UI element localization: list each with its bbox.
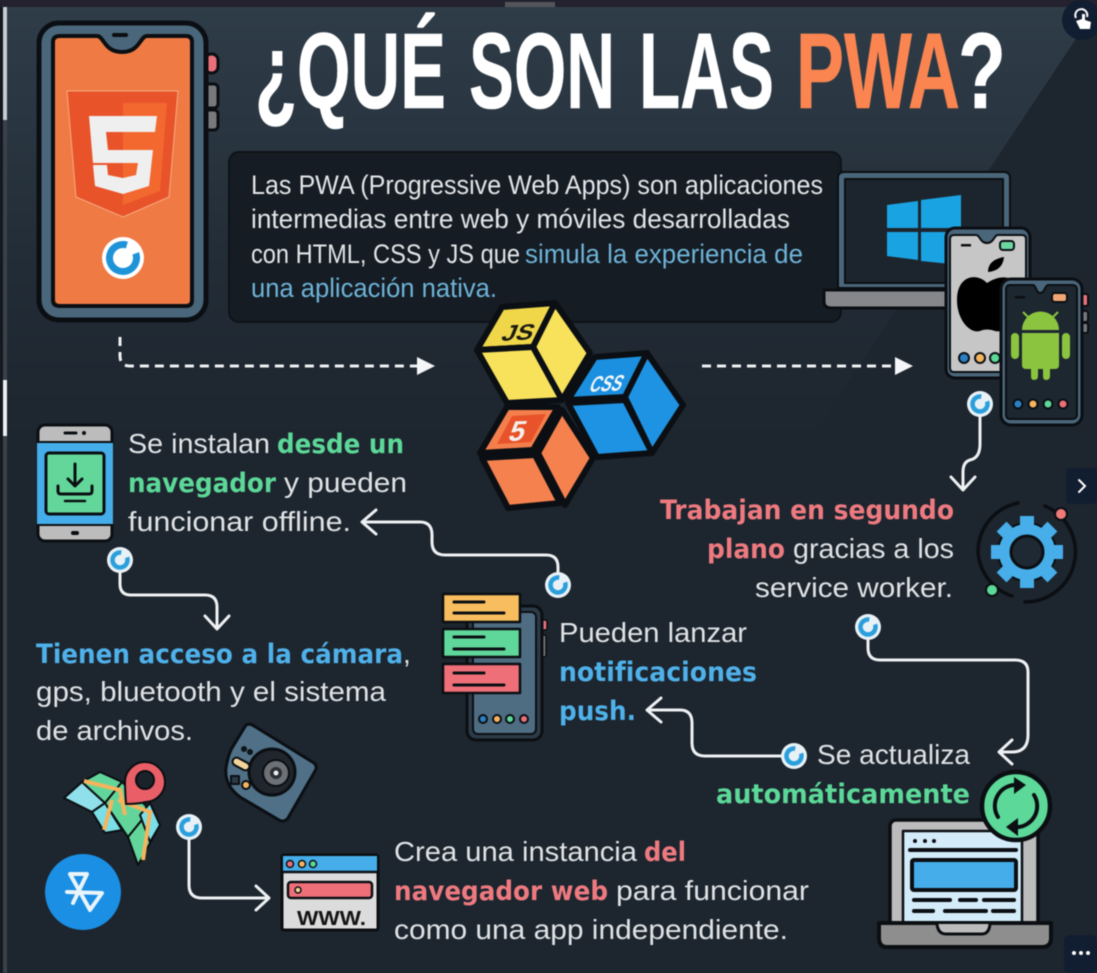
icon: update badge [982,772,1050,840]
title: SON [469,10,615,131]
text block: notificaciones [559,617,757,727]
text block: instancia: del [644,837,686,868]
text block: acceso: de archivos. [36,715,193,746]
icon: HTML5 shield [67,91,178,217]
arrow: instalación to acceso [107,547,229,629]
text block: instancia [394,836,809,945]
icon: phone with HTML5 [39,23,218,320]
title: ? [958,10,1006,131]
arrow: devices to segundo plano [951,391,993,490]
panel: intro text: intermedias entre web y móviles desarrolladas [251,204,790,234]
icon: JS CSS HTML5 cubes: 5 [505,416,531,448]
button: next [1066,468,1097,504]
icon: camera [226,724,316,821]
text block: instalación: Se instalan [128,428,270,459]
text block: notificaciones: Pueden lanzar [559,617,747,648]
title [255,10,1006,131]
panel: intro text [229,152,841,322]
text block: instancia: para funcionar [616,875,809,906]
icon: download phone [37,425,113,541]
text block: instalación: desde un [277,429,404,460]
button: hand cursor [1062,0,1097,40]
text block: acceso [36,638,411,746]
text block: instalación: funcionar offline. [128,506,351,537]
text block: segundo plano: plano [707,534,785,565]
button: more options [1064,935,1097,973]
icon: JS CSS HTML5 cubes [477,303,683,508]
icon: service worker gear [976,501,1078,603]
title: LAS [639,10,774,131]
text block: actualización: Se actualiza [817,739,970,770]
text block: instalación: y pueden [284,467,407,498]
title: ¿QUÉ [255,10,446,131]
icon: laptop with Windows [824,172,1010,308]
icon: browser window [282,855,378,930]
text block: acceso: Tienen acceso a la cámara [36,639,403,670]
icon: browser window: WWW. [297,908,366,930]
icon: laptop with update badge [879,772,1051,947]
text block: acceso: gps, bluetooth y el sistema [36,676,386,707]
loader dot [102,237,144,279]
panel: intro text: con HTML, CSS y JS que [251,239,520,269]
text block: segundo plano [660,495,954,603]
icon: JS CSS HTML5 cubes: CSS [586,370,628,397]
text block: actualización [716,739,970,810]
text block: acceso: , [403,638,411,669]
icon: Android phone [1001,279,1088,425]
icon: map with pin [64,762,165,865]
text block: notificaciones: notificaciones [559,657,757,688]
panel: intro text: una aplicación nativa. [251,273,497,303]
text block: segundo plano: service worker. [755,572,953,603]
dashed arrow: phone to cubes [120,337,435,375]
arrow: acceso to navegador [176,814,269,910]
Android robot [1011,312,1070,380]
arrow: segundo plano to actualiza [855,614,1028,764]
icon: Apple phone [946,228,1030,378]
title: PWA [796,10,960,131]
icon: bluetooth [45,854,121,930]
panel: intro text: Las PWA (Progressive Web Apps) son aplicaciones [251,170,823,200]
text block: instancia: navegador web [394,876,608,907]
arrow: notificaciones to instalación [362,510,571,598]
panel: intro text: simula la experiencia de [525,239,803,269]
text block: instancia: como una app independiente. [394,914,788,945]
text block: notificaciones: push. [559,696,636,727]
text block: instancia: Crea una instancia [394,836,637,867]
icon: JS CSS HTML5 cubes: JS [498,319,539,346]
text block: segundo plano: Trabajan en segundo [660,495,954,526]
text block: instalación: navegador [128,468,277,499]
text block: actualización: automáticamente [716,779,970,810]
icon: notifications phone [443,594,547,740]
text block: instalación [128,428,407,537]
text block: segundo plano: gracias a los [793,533,954,564]
arrow: actualiza to notificaciones [647,698,807,769]
dashed arrow: cubes to devices [702,357,913,375]
